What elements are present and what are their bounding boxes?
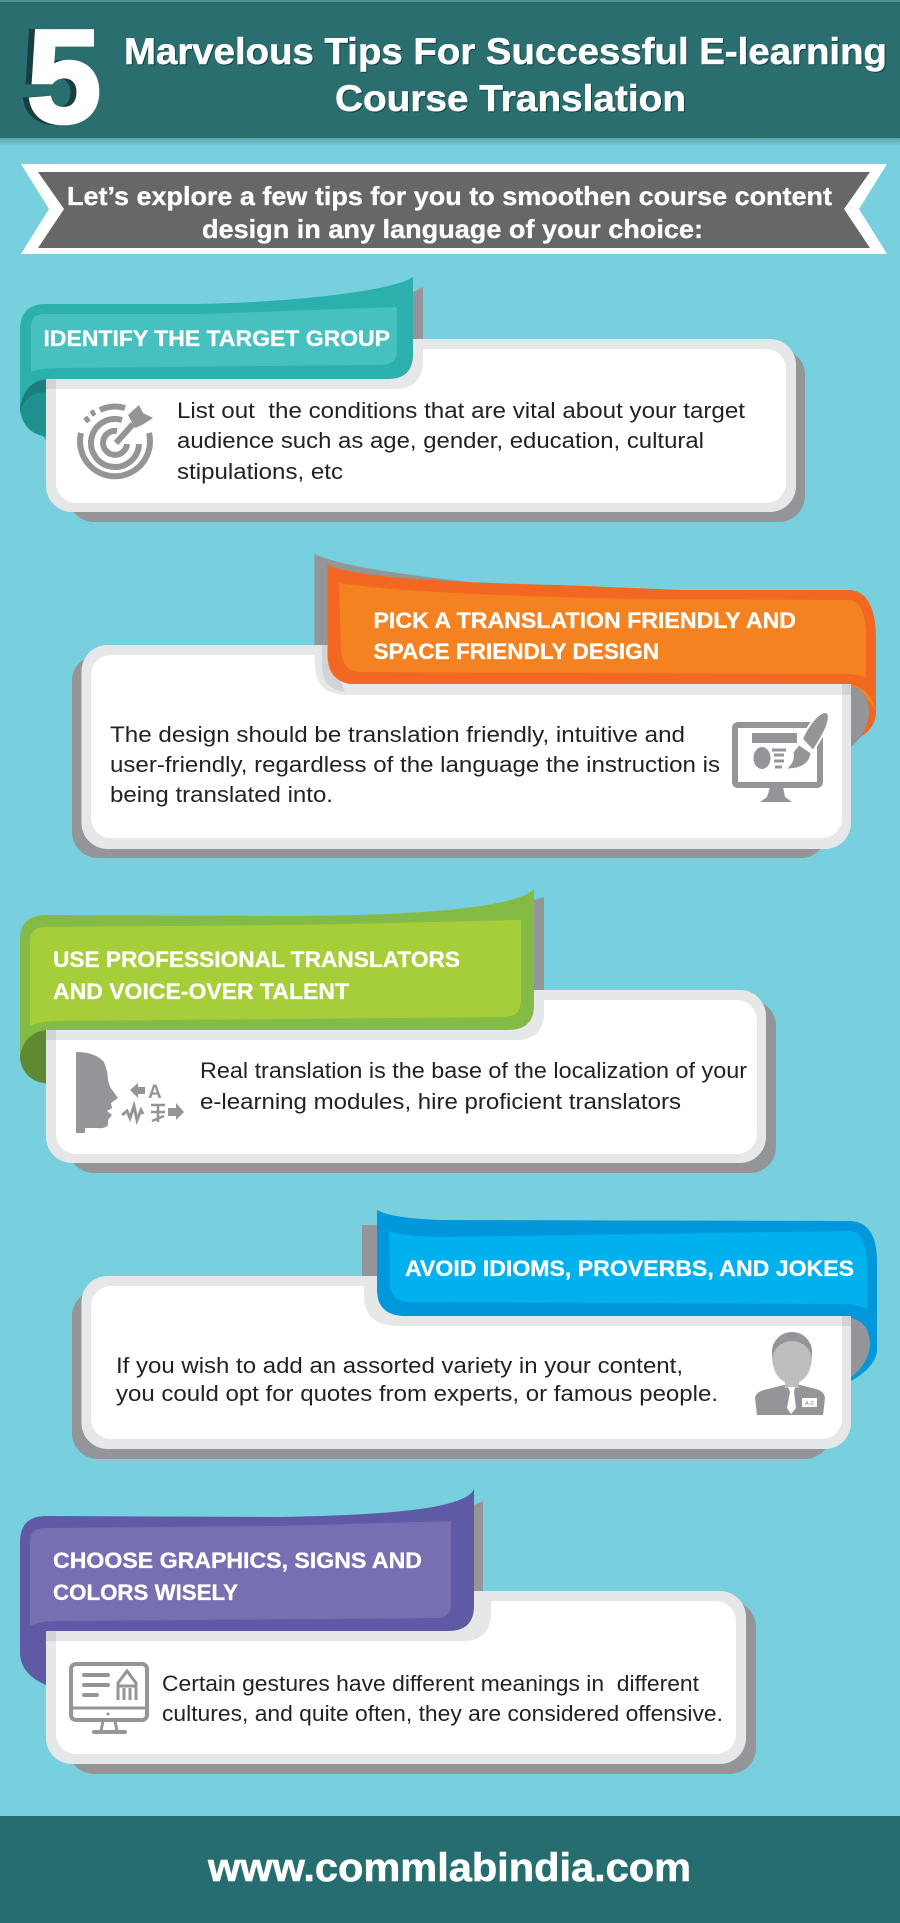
ribbon: choose graphics, signs and colors: COLORS WISELY: [53, 1580, 238, 1605]
body text: The design should be translation friendly, intuitive and: [110, 722, 685, 747]
ribbon: choose graphics, signs and colors: CHOOSE GRAPHICS, SIGNS AND: [53, 1548, 422, 1573]
panel 2: translation friendly design: [72, 554, 876, 858]
icon: person with badge: A-Z: [805, 1401, 814, 1407]
ribbon: identify the target group: IDENTIFY THE TARGET GROUP: [44, 326, 390, 351]
icon: monitor with text and pencil: [71, 1664, 147, 1732]
body text: Certain gestures have different meanings in different: [162, 1671, 699, 1696]
body text: [116, 1353, 718, 1406]
ribbon: avoid idioms, proverbs, and jokes: [377, 1210, 877, 1345]
icon: target with arrow: [80, 405, 153, 476]
icon: monitor with paint brush: [735, 712, 829, 802]
ribbon: pick a translation friendly design: SPACE FRIENDLY DESIGN: [374, 639, 659, 664]
intro banner: design in any language of your choice:: [202, 214, 703, 244]
ribbon: use professional translators: [20, 889, 534, 1056]
panel 3: professional translators: [20, 889, 776, 1173]
panel 4: avoid idioms: [72, 1210, 877, 1459]
icon: speaking head with translation symbols: [76, 1052, 184, 1133]
ribbon: choose graphics, signs and colors: [20, 1489, 474, 1655]
ribbon: identify the target group: [20, 277, 413, 408]
ribbon: pick a translation friendly design: [328, 565, 876, 712]
big number 5: 5: [21, 3, 95, 150]
ribbon: avoid idioms, proverbs, and jokes: AVOID IDIOMS, PROVERBS, AND JOKES: [405, 1256, 854, 1281]
body text: user-friendly, regardless of the language the instruction is: [110, 752, 720, 777]
intro banner: Let’s explore a few tips for you to smoothen course content: [67, 181, 832, 211]
ribbon: pick a translation friendly design: PICK A TRANSLATION FRIENDLY AND: [374, 608, 796, 633]
icon: person with badge: [755, 1332, 825, 1415]
header band: [0, 0, 900, 150]
body text: cultures, and quite often, they are considered offensive.: [162, 1701, 723, 1726]
body text: stipulations, etc: [177, 459, 343, 484]
body text: [162, 1671, 723, 1726]
icon: speaking head with translation symbols: A: [148, 1082, 162, 1103]
title: Marvelous Tips For Successful E-learning: [124, 31, 887, 72]
ribbon: use professional translators: USE PROFESSIONAL TRANSLATORS: [53, 947, 460, 972]
body text: [177, 398, 745, 484]
body text: [200, 1058, 747, 1114]
intro banner: [21, 164, 887, 254]
panel 1: identify the target group: [20, 277, 805, 522]
title: Course Translation: [335, 78, 686, 119]
body text: Real translation is the base of the localization of your: [200, 1058, 747, 1083]
body text: audience such as age, gender, education, cultural: [177, 428, 704, 453]
body text: List out the conditions that are vital about your target: [177, 398, 745, 423]
big number 5: 5: [27, 3, 101, 150]
body text: e-learning modules, hire proficient translators: [200, 1089, 681, 1114]
body text: [110, 722, 720, 807]
footer band with website: www.commlabindia.com: [207, 1846, 691, 1890]
ribbon: use professional translators: AND VOICE-OVER TALENT: [53, 979, 350, 1004]
body text: If you wish to add an assorted variety in your content,: [116, 1353, 683, 1378]
panel 5: graphics, signs and colors: [20, 1489, 756, 1774]
body text: you could opt for quotes from experts, or famous people.: [116, 1381, 718, 1406]
title: [124, 31, 887, 119]
body text: being translated into.: [110, 782, 333, 807]
footer band with website: [0, 1816, 900, 1923]
